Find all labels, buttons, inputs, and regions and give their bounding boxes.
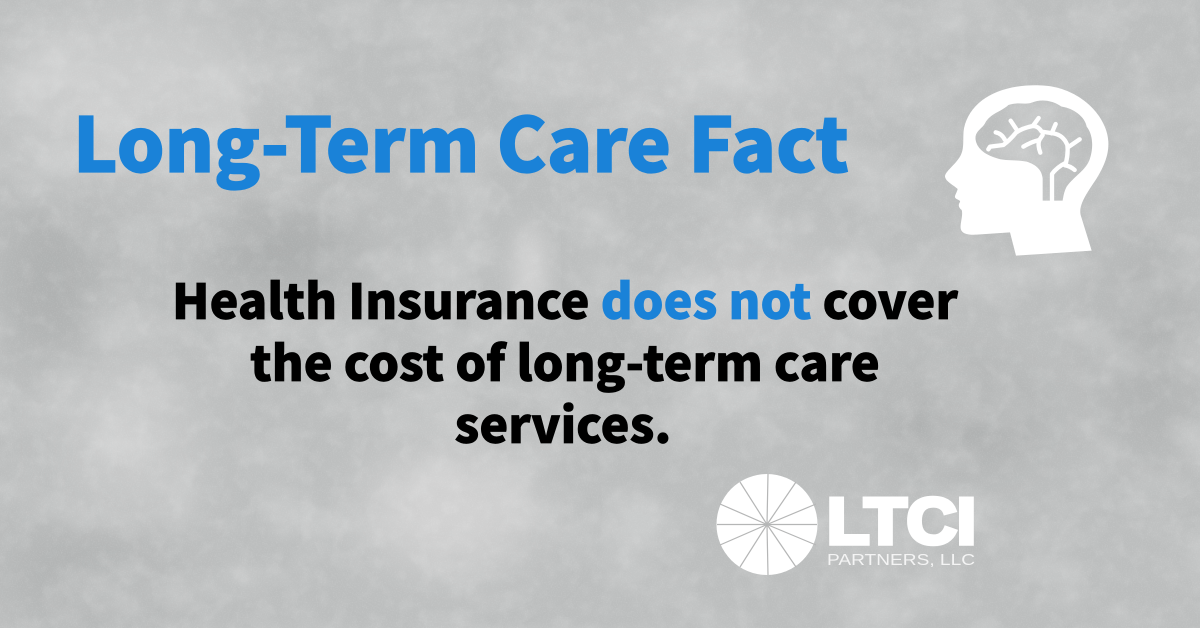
body text: [172, 263, 958, 457]
line 1: Health Insurance does not cover: [172, 263, 958, 333]
title: Long-Term Care Fact: [73, 85, 849, 194]
line 3: services.: [455, 387, 671, 457]
logo tagline: PARTNERS, LLC: [827, 552, 975, 569]
logo: LTCI Partners: [716, 474, 976, 575]
icon: head with brain: [945, 85, 1108, 256]
logo wordmark: LTCI: [827, 484, 976, 558]
line 2: the cost of long-term care: [250, 325, 880, 395]
logo wheel: [716, 474, 818, 575]
